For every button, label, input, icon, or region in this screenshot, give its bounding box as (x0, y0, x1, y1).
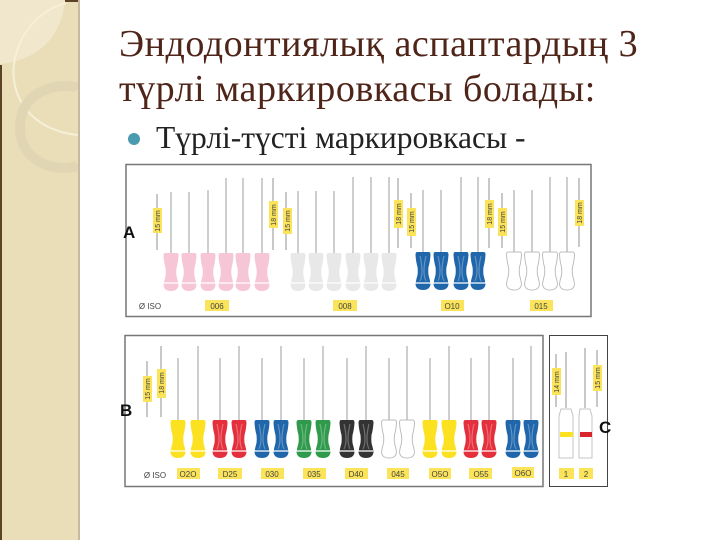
handle stripes A (164, 282, 486, 284)
dimension lines B (147, 346, 161, 417)
bullet marker (128, 133, 140, 145)
panel A: 15 mm (285, 210, 292, 232)
dimension labels A (153, 200, 584, 236)
panel B: O2O (180, 470, 196, 479)
panel C (550, 336, 611, 486)
pink handles 006 (164, 253, 270, 291)
black handles 040 (340, 420, 374, 458)
red band (580, 432, 592, 437)
panel C: 15 mm (595, 367, 602, 389)
panel A: 15 mm (155, 210, 162, 232)
needles B (178, 346, 531, 420)
panel B: 030 (265, 470, 279, 479)
panel B: O55 (473, 470, 489, 479)
panel A: 015 (534, 302, 548, 311)
label B: B (120, 401, 132, 420)
panel B: O5O (432, 470, 448, 479)
needles A (171, 177, 567, 253)
panel B (120, 336, 543, 486)
panel A: 18 mm (271, 204, 278, 226)
dimension lines C (556, 350, 597, 407)
panel A: 18 mm (396, 203, 403, 225)
panel A: 008 (338, 302, 352, 311)
panel B: 15 mm (145, 378, 152, 400)
label C: C (599, 418, 611, 437)
panel B: 035 (307, 470, 321, 479)
size labels B (177, 467, 534, 479)
red handles 025 and 055 (212, 420, 496, 458)
panel A: 18 mm (577, 202, 584, 224)
panel A: 15 mm (409, 211, 416, 233)
dimension labels B (143, 369, 166, 402)
panel B: D25 (223, 470, 238, 479)
white handles 045 (382, 420, 414, 458)
yellow handles 020 and 050 (170, 420, 456, 458)
title (119, 23, 638, 110)
panel A (123, 164, 591, 316)
panel A: O10 (444, 302, 460, 311)
panel B: 045 (391, 470, 405, 479)
panel B: D40 (349, 470, 364, 479)
white handles 015 (506, 252, 574, 290)
light grey handles 008 (290, 253, 396, 291)
blue handles 030 and 060 (254, 420, 538, 458)
panel A: 006 (210, 302, 224, 311)
size labels C (559, 468, 593, 479)
title: Эндодонтиялық аспаптардың 3 (119, 23, 638, 65)
title: түрлі маркировкасы болады: (119, 68, 596, 110)
label A: A (123, 223, 135, 242)
panel B: Ø ISO (144, 471, 166, 480)
sidebar: decorative beige band (0, 0, 80, 540)
panel A: Ø ISO (139, 302, 161, 311)
blue handles 010 (416, 252, 486, 290)
bullet text: Түрлі-түсті маркировкасы - (156, 120, 525, 155)
dimension lines A (157, 178, 579, 250)
panel B: 18 mm (159, 372, 166, 394)
handle stripes B (171, 450, 538, 452)
panel C: 2 (584, 470, 589, 479)
handles C (559, 409, 592, 458)
needles C (566, 348, 585, 408)
panel C: 1 (564, 470, 569, 479)
panel A: 18 mm (487, 203, 494, 225)
green handles 035 (296, 420, 330, 458)
panel C: 14 mm (554, 371, 561, 393)
yellow band (560, 432, 573, 437)
size labels A (205, 300, 553, 311)
dimension labels C (552, 365, 602, 395)
panel A: 15 mm (500, 211, 507, 233)
panel B: O6O (515, 469, 531, 478)
